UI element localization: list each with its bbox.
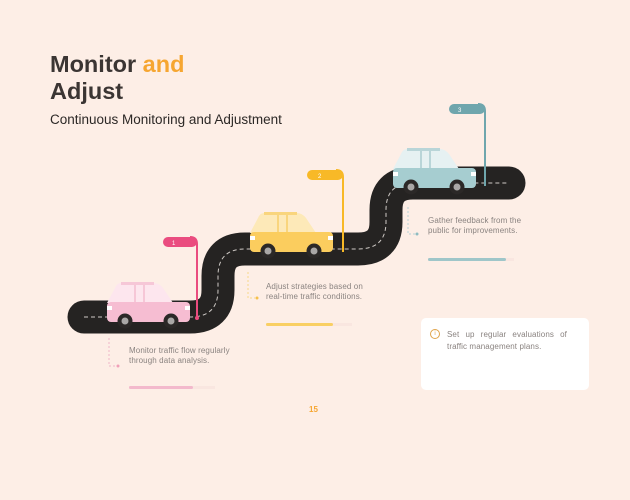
text step 3	[428, 216, 521, 235]
callout box	[421, 318, 589, 390]
text step 2: Adjust strategies based on	[266, 282, 363, 291]
title: Monitor and	[50, 51, 184, 77]
flag 1	[163, 237, 199, 320]
road	[84, 183, 509, 317]
flag 2	[307, 170, 343, 252]
text step 3: Gather feedback from the	[428, 216, 521, 225]
text step 2: real-time traffic conditions.	[266, 292, 362, 301]
title	[50, 51, 184, 104]
text step 1	[129, 346, 230, 365]
flag 3	[449, 104, 485, 186]
title: Adjust	[50, 78, 123, 104]
flag 1: 1	[172, 241, 176, 247]
connector 2	[248, 272, 258, 300]
callout text: Set up regular evaluations of traffic management plans.	[447, 330, 567, 351]
page number: 15	[309, 405, 318, 414]
car pink	[107, 282, 190, 328]
text step 1: through data analysis.	[129, 356, 209, 365]
text step 2	[266, 282, 363, 301]
text step 1: Monitor traffic flow regularly	[129, 346, 230, 355]
text step 3: public for improvements.	[428, 226, 518, 235]
connector 3	[408, 207, 418, 236]
car teal	[393, 148, 476, 194]
connector 1	[109, 338, 120, 368]
progress bars	[129, 258, 514, 389]
icon: info	[430, 329, 440, 339]
subtitle: Continuous Monitoring and Adjustment	[50, 112, 282, 127]
flag 2: 2	[318, 174, 322, 180]
icon: info: i	[434, 331, 436, 337]
flag 3: 3	[458, 108, 462, 114]
car yellow	[250, 212, 333, 258]
